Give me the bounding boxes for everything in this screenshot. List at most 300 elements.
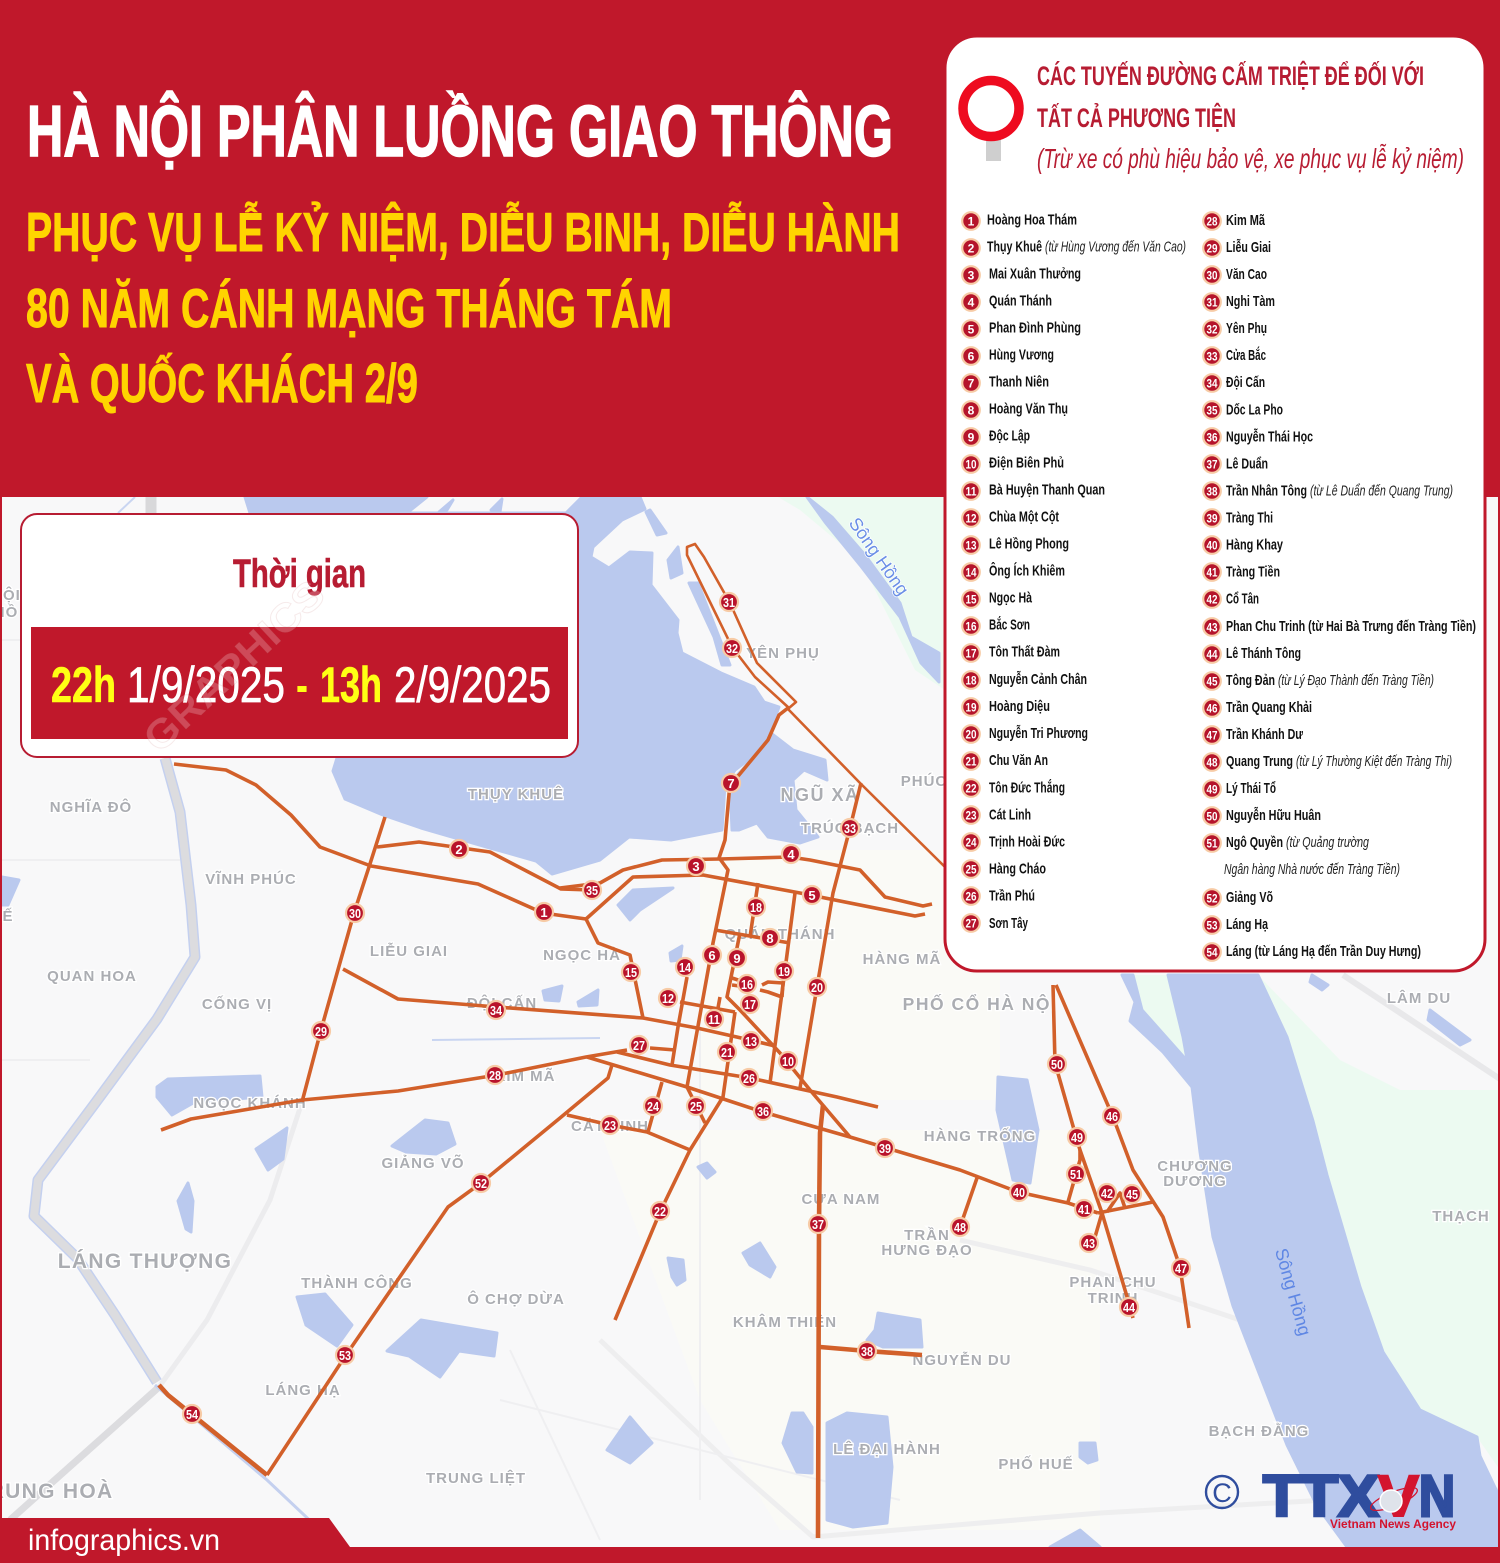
- route 5: [962, 320, 1081, 338]
- route 26: Trần Phú: [989, 888, 1035, 904]
- route 51: [1203, 834, 1400, 878]
- bottom red bar with source tab: [0, 1518, 1500, 1563]
- route 27: Sơn Tây: [989, 915, 1028, 932]
- route 14: [962, 562, 1065, 581]
- time card: [21, 514, 578, 757]
- route 48: [1203, 753, 1452, 771]
- map: place labels: QUAN HOA: [47, 968, 137, 985]
- route 49: Lý Thái Tổ: [1226, 780, 1276, 797]
- subtitle: VÀ QUỐC KHÁCH 2/9: [26, 352, 418, 414]
- map: place labels: NGUYỄN DU: [912, 1352, 1012, 1369]
- map: place labels: LÁNG THƯỢNG: [58, 1250, 232, 1273]
- map: place labels: HÀNG TRỐNG: [924, 1127, 1036, 1145]
- subtitle: 80 NĂM CÁNH MẠNG THÁNG TÁM: [26, 277, 672, 339]
- route 3: Mai Xuân Thưởng: [989, 266, 1081, 282]
- route 51: Ngô Quyền: [1226, 834, 1283, 851]
- map: place labels: THỤY KHUÊ: [468, 785, 564, 803]
- route 51: 51: [1206, 836, 1218, 850]
- route list: right column: [1203, 212, 1476, 961]
- route 26: 26: [966, 890, 977, 904]
- route 33: 33: [1206, 350, 1218, 364]
- map: numbered road markers: 7: [727, 776, 735, 791]
- route 13: 13: [966, 538, 977, 552]
- map: [0, 497, 1500, 1547]
- route 29: 29: [1206, 242, 1218, 256]
- route 37: 37: [1206, 458, 1218, 472]
- route 22: [962, 778, 1065, 797]
- route 19: [962, 698, 1050, 716]
- map: warm district tint: [600, 850, 1100, 1530]
- route 32: [1203, 320, 1267, 338]
- route 3: [962, 266, 1081, 284]
- route 19: 19: [966, 700, 977, 714]
- route 21: 21: [966, 754, 977, 768]
- route 32: Yên Phụ: [1226, 320, 1267, 337]
- route 25: 25: [966, 862, 977, 876]
- map: place labels: TRUNG LIỆT: [426, 1469, 526, 1487]
- map: numbered road markers: 44: [1123, 1300, 1136, 1315]
- map: numbered road markers: 15: [625, 965, 637, 980]
- logo: TTXVN: N: [1419, 1464, 1455, 1529]
- route 28: 28: [1206, 214, 1218, 228]
- map: place labels: ĐỘI CẤN: [467, 994, 537, 1012]
- route 34: 34: [1206, 376, 1218, 390]
- route 2: [962, 238, 1186, 257]
- map: numbered road markers: 50: [1051, 1057, 1063, 1072]
- map: numbered road markers: 4: [787, 847, 795, 862]
- map: place labels: LÊ ĐẠI HÀNH: [833, 1440, 941, 1458]
- route 25: Hàng Cháo: [989, 860, 1046, 878]
- map: numbered road markers: 41: [1078, 1202, 1090, 1217]
- route 19: Hoàng Diệu: [989, 698, 1050, 715]
- route 35: [1203, 401, 1283, 419]
- map: numbered road markers: 12: [662, 991, 674, 1006]
- route 18: 18: [966, 674, 977, 688]
- route 42: 42: [1206, 592, 1218, 606]
- logo: TTXVN: Vietnam News Agency: [1330, 1517, 1456, 1531]
- route 23: Cát Linh: [989, 806, 1031, 824]
- map: numbered road markers: 36: [757, 1104, 769, 1119]
- time card heading: Thời gian: [233, 552, 366, 596]
- route 8: [962, 400, 1068, 419]
- route 45: [1203, 672, 1434, 690]
- map: place labels: PHÚC XÁ: [901, 772, 975, 790]
- map: numbered road markers: 53: [339, 1348, 351, 1363]
- route 47: 47: [1206, 728, 1218, 742]
- route 6: [962, 346, 1054, 365]
- map: place labels: LIỄU GIAI: [370, 943, 448, 960]
- map: numbered road markers: 22: [654, 1204, 666, 1219]
- map: numbered road markers: 49: [1071, 1130, 1083, 1145]
- route 39: [1203, 509, 1273, 527]
- route 36: [1203, 428, 1313, 446]
- map: numbered road markers: 18: [750, 900, 762, 915]
- map: numbered road markers: 3: [692, 859, 700, 874]
- map: numbered road markers: 54: [186, 1407, 199, 1422]
- panel heading: [1037, 59, 1464, 174]
- route 17: 17: [966, 646, 977, 660]
- route 47: [1203, 726, 1303, 744]
- route 11: [962, 482, 1105, 500]
- route 48: 48: [1206, 756, 1218, 770]
- route 17: Tôn Thất Đàm: [989, 644, 1060, 660]
- route 22: Tôn Đức Thắng: [989, 778, 1065, 796]
- map: Truc Bach lake: [730, 733, 827, 843]
- map: numbered road markers: 46: [1106, 1109, 1118, 1124]
- route 50: 50: [1206, 810, 1218, 824]
- route 12: Chùa Một Cột: [989, 508, 1059, 526]
- route 2: 2: [968, 242, 975, 256]
- map: numbered road markers: 17: [744, 997, 756, 1012]
- route panel: [945, 36, 1485, 971]
- route 2: (từ Hùng Vương đến Văn Cao): [1045, 238, 1186, 256]
- route 27: [962, 914, 1028, 932]
- route 52: Giảng Võ: [1226, 889, 1273, 906]
- map: place labels: CỬA NAM: [802, 1190, 880, 1208]
- route 40: 40: [1206, 538, 1218, 552]
- route 28: [1203, 212, 1265, 230]
- route 4: 4: [968, 296, 975, 310]
- route 16: Bắc Sơn: [989, 616, 1030, 634]
- route 18: Nguyễn Cảnh Chân: [989, 671, 1087, 688]
- route 37: Lê Duẩn: [1226, 456, 1268, 472]
- route 52: 52: [1206, 892, 1218, 906]
- route 41: Tràng Tiền: [1226, 564, 1280, 580]
- map: numbered road markers: 29: [315, 1024, 327, 1039]
- route 49: 49: [1206, 782, 1218, 796]
- route 4: Quán Thánh: [989, 292, 1052, 310]
- route 7: [962, 374, 1049, 392]
- route 30: 30: [1206, 268, 1218, 282]
- route 34: [1203, 374, 1265, 392]
- route 39: Tràng Thi: [1226, 510, 1273, 526]
- route 24: 24: [966, 836, 977, 850]
- route 34: Đội Cấn: [1226, 374, 1265, 391]
- route 4: [962, 292, 1052, 311]
- route 44: 44: [1206, 648, 1218, 662]
- route 32: 32: [1206, 322, 1218, 336]
- route 27: 27: [966, 916, 977, 930]
- map: place labels: TRÚC BẠCH: [801, 819, 899, 837]
- time range text: 1/9/2025: [127, 657, 285, 713]
- route 51: Ngân hàng Nhà nước đến Tràng Tiền): [1224, 861, 1400, 878]
- route 2: Thụy Khuê: [987, 238, 1042, 256]
- map: numbered road markers: 16: [741, 977, 753, 992]
- time range text: -: [296, 657, 308, 713]
- route 20: Nguyễn Tri Phương: [989, 725, 1088, 742]
- route 10: 10: [966, 458, 977, 472]
- map: place labels: CÁT LINH: [571, 1118, 649, 1135]
- source: infographics.vn: infographics.vn: [28, 1524, 220, 1557]
- route 48: Quang Trung: [1226, 753, 1293, 770]
- route 35: 35: [1206, 404, 1218, 418]
- map: place labels: THẠCH: [1432, 1208, 1490, 1225]
- route 53: 53: [1206, 918, 1218, 932]
- route 21: Chu Văn An: [989, 752, 1048, 769]
- time range text: 2/9/2025: [394, 657, 551, 713]
- map: place labels: DƯƠNG: [1163, 1173, 1227, 1190]
- route 38: 38: [1206, 484, 1218, 498]
- map: numbered road markers: 37: [812, 1217, 824, 1232]
- map: place labels: QUÁN THÁNH: [725, 926, 835, 943]
- map: numbered road markers: 14: [679, 960, 692, 975]
- route 43: 43: [1206, 620, 1218, 634]
- map: numbered road markers: 38: [861, 1344, 873, 1359]
- route 50: [1203, 807, 1321, 825]
- copyright icon: C: [1212, 1478, 1232, 1508]
- route 51: (từ Quảng trường: [1286, 834, 1369, 851]
- map: place labels: TRINH: [1088, 1290, 1138, 1307]
- map: numbered road markers: 42: [1101, 1186, 1113, 1201]
- map: numbered road markers: 24: [647, 1099, 660, 1114]
- watermark: GRAPHICS: [135, 572, 333, 761]
- route 36: 36: [1206, 430, 1218, 444]
- route 8: Hoàng Văn Thụ: [989, 400, 1068, 418]
- route 54: Láng (từ Láng Hạ đến Trần Duy Hưng): [1226, 943, 1421, 960]
- map: numbered road markers: 2: [455, 842, 463, 857]
- route 41: [1203, 563, 1280, 581]
- map: numbered road markers: 21: [721, 1045, 733, 1060]
- map: place labels: CHƯƠNG: [1157, 1158, 1233, 1175]
- map: numbered road markers: 13: [745, 1034, 757, 1049]
- map: place labels: PHAN CHU: [1069, 1274, 1157, 1291]
- map: place labels: Ô CHỢ DỪA: [467, 1290, 565, 1308]
- route 6: Hùng Vương: [989, 346, 1054, 364]
- time range text: 13h: [320, 657, 382, 713]
- route 33: Cửa Bắc: [1226, 346, 1266, 364]
- route 5: 5: [968, 322, 975, 336]
- route 9: Độc Lập: [989, 428, 1030, 444]
- red header background: [0, 0, 1500, 497]
- map: numbered road markers: 8: [766, 931, 774, 946]
- map: place labels: KIM MÃ: [494, 1067, 556, 1085]
- route 29: Liễu Giai: [1226, 239, 1271, 256]
- route 44: [1203, 645, 1301, 663]
- route 46: 46: [1206, 702, 1218, 716]
- route 1: [962, 212, 1077, 230]
- route 13: Lê Hồng Phong: [989, 536, 1069, 552]
- route 53: [1203, 916, 1268, 934]
- panel heading: TẤT CẢ PHƯƠNG TIỆN: [1037, 101, 1236, 133]
- route 15: [962, 590, 1032, 608]
- map: place labels: NGHĨA ĐÔ: [50, 798, 132, 816]
- route 30: [1203, 266, 1267, 284]
- route 22: 22: [966, 782, 977, 796]
- map: numbered road markers: 10: [782, 1054, 794, 1069]
- map: numbered road markers: 28: [489, 1068, 501, 1083]
- route 11: Bà Huyện Thanh Quan: [989, 482, 1105, 498]
- route 31: [1203, 293, 1275, 311]
- route 41: 41: [1206, 566, 1218, 580]
- route 49: [1203, 780, 1276, 798]
- route 53: Láng Hạ: [1226, 916, 1268, 933]
- map: place labels: NGỌC HÀ: [543, 947, 621, 964]
- map: numbered road markers: 43: [1083, 1236, 1095, 1251]
- route 31: 31: [1206, 296, 1218, 310]
- map: numbered road markers: 35: [586, 883, 598, 898]
- route 1: Hoàng Hoa Thám: [987, 212, 1077, 228]
- map: numbered road markers: 34: [490, 1003, 503, 1018]
- route 23: 23: [966, 808, 977, 822]
- map: Red River: [1168, 975, 1500, 1547]
- map: numbered road markers: 1: [540, 905, 548, 920]
- route 16: [962, 616, 1030, 635]
- route 45: 45: [1206, 674, 1218, 688]
- route 42: Cổ Tân: [1226, 590, 1259, 608]
- map: numbered road markers: 32: [726, 641, 738, 656]
- route 12: [962, 508, 1059, 527]
- map: place labels: HÀNG MÃ: [863, 950, 941, 968]
- route 20: 20: [966, 728, 977, 742]
- map: numbered road markers: [183, 593, 1190, 1423]
- map: numbered road markers: 26: [743, 1071, 755, 1086]
- map: numbered road markers: 47: [1175, 1261, 1187, 1276]
- logo: TTXVN: V: [1378, 1464, 1419, 1529]
- route 3: 3: [968, 268, 975, 282]
- route 40: Hàng Khay: [1226, 536, 1283, 554]
- map: place labels: PHỐ HUẾ: [998, 1455, 1074, 1473]
- map: place labels: [0, 586, 1490, 1503]
- map: numbered road markers: 9: [733, 951, 741, 966]
- map: numbered road markers: 51: [1070, 1167, 1082, 1182]
- route 29: [1203, 239, 1271, 257]
- map: numbered road markers: 45: [1126, 1187, 1138, 1202]
- logo: TTXVN: [1263, 1464, 1456, 1531]
- map: place labels: VĨNH PHÚC: [205, 870, 297, 888]
- map: major grey roads: [2, 497, 1500, 1540]
- map: numbered road markers: 25: [690, 1099, 702, 1114]
- route 15: 15: [966, 592, 977, 606]
- map: green river banks: [778, 497, 1500, 1470]
- route 13: [962, 536, 1069, 554]
- map: small lakes: [2, 497, 1470, 1547]
- map: place labels: CỐNG VỊ: [202, 995, 272, 1013]
- route 28: Kim Mã: [1226, 212, 1265, 229]
- route 39: 39: [1206, 512, 1218, 526]
- route 12: 12: [966, 512, 977, 526]
- map side edges: [0, 497, 1500, 1547]
- route 52: [1203, 889, 1273, 907]
- subtitle: [26, 201, 900, 414]
- map: place labels: HƯNG ĐẠO: [881, 1242, 973, 1259]
- route 8: 8: [968, 404, 975, 418]
- map: place labels: THÀNH CÔNG: [301, 1274, 413, 1292]
- map: numbered road markers: 48: [954, 1220, 966, 1235]
- title: HÀ NỘI PHÂN LUỒNG GIAO THÔNG: [27, 91, 893, 172]
- map: numbered road markers: 39: [879, 1141, 891, 1156]
- route 9: 9: [968, 430, 975, 444]
- route 54: [1203, 943, 1421, 961]
- route 20: [962, 725, 1088, 743]
- route 21: [962, 752, 1048, 770]
- map: place labels: LÁNG HẠ: [265, 1382, 341, 1399]
- time range text: 22h: [51, 657, 116, 713]
- map: numbered road markers: 19: [778, 964, 790, 979]
- route 26: [962, 887, 1035, 905]
- route 11: 11: [966, 484, 977, 498]
- route 38: [1203, 482, 1453, 500]
- map: restricted roads: [159, 544, 1189, 1538]
- route 35: Dốc La Pho: [1226, 402, 1283, 418]
- route list: left column: [962, 212, 1186, 932]
- map: numbered road markers: 40: [1013, 1185, 1025, 1200]
- route 14: 14: [966, 566, 977, 580]
- map: place labels: YÊN PHỤ: [746, 644, 820, 662]
- map: numbered road markers: 30: [349, 906, 361, 921]
- route 50: Nguyễn Hữu Huân: [1226, 807, 1321, 824]
- map: place labels: BẠCH ĐẰNG: [1209, 1422, 1309, 1440]
- route 23: [962, 806, 1031, 824]
- map: numbered road markers: 23: [604, 1118, 616, 1133]
- map: place labels: KHÂM THIÊN: [733, 1313, 837, 1331]
- map: numbered road markers: 52: [475, 1176, 487, 1191]
- map: numbered road markers: 27: [633, 1038, 645, 1053]
- map: numbered road markers: 33: [844, 821, 856, 836]
- map: numbered road markers: 11: [708, 1012, 720, 1027]
- route 16: 16: [966, 620, 977, 634]
- route 25: [962, 860, 1046, 878]
- route 30: Văn Cao: [1226, 266, 1267, 283]
- map: place labels: Ế: [2, 908, 14, 925]
- route 42: [1203, 590, 1259, 608]
- route 37: [1203, 455, 1268, 473]
- map: river name upper: Sông Hồng: [845, 514, 913, 599]
- map: place labels: NGỌC KHÁNH: [193, 1095, 307, 1112]
- route 40: [1203, 536, 1283, 554]
- logo: TTXVN: TTX: [1263, 1464, 1379, 1529]
- route 14: Ông Ích Khiêm: [989, 562, 1065, 580]
- route 10: [962, 454, 1064, 473]
- route 10: Điện Biên Phủ: [989, 454, 1064, 472]
- route 46: Trần Quang Khải: [1226, 699, 1312, 716]
- route 24: [962, 833, 1065, 851]
- route 1: 1: [968, 214, 975, 228]
- route 45: (từ Lý Đạo Thành đến Tràng Tiền): [1278, 672, 1434, 689]
- map: place labels: LÂM DU: [1387, 989, 1451, 1007]
- route 15: Ngọc Hà: [989, 590, 1032, 606]
- route 36: Nguyễn Thái Học: [1226, 428, 1313, 446]
- route 38: Trần Nhân Tông: [1226, 482, 1307, 500]
- copyright icon: [1206, 1476, 1238, 1508]
- map: place labels: PHỐ CỔ HÀ NỘI: [903, 993, 1057, 1014]
- route 6: 6: [968, 350, 975, 364]
- route 5: Phan Đình Phùng: [989, 320, 1081, 336]
- map: river branch: [1122, 975, 1192, 1087]
- time range text: [51, 657, 551, 713]
- map: West Lake: [245, 497, 779, 874]
- route 7: 7: [968, 376, 975, 390]
- route 7: Thanh Niên: [989, 374, 1049, 390]
- route 47: Trần Khánh Dư: [1226, 726, 1303, 743]
- icon: no-entry sign: [963, 80, 1019, 161]
- route 17: [962, 644, 1060, 662]
- route 45: Tông Đản: [1226, 672, 1275, 689]
- map: river name lower: Sông Hồng: [1271, 1246, 1315, 1338]
- map: numbered road markers: 20: [811, 980, 823, 995]
- map: numbered road markers: 5: [808, 888, 816, 903]
- map: numbered road markers: 6: [708, 948, 716, 963]
- route 18: [962, 671, 1087, 689]
- route 24: Trịnh Hoài Đức: [989, 834, 1065, 850]
- map: place labels: TRẦN: [904, 1227, 950, 1244]
- route 44: Lê Thánh Tông: [1226, 645, 1301, 662]
- map: place labels: NGŨ XÃ: [780, 784, 860, 805]
- map: numbered road markers: 31: [723, 595, 735, 610]
- route 54: 54: [1206, 946, 1218, 960]
- route 33: [1203, 346, 1266, 365]
- map: place labels: GIẢNG VÕ: [381, 1154, 465, 1172]
- route 9: [962, 428, 1030, 446]
